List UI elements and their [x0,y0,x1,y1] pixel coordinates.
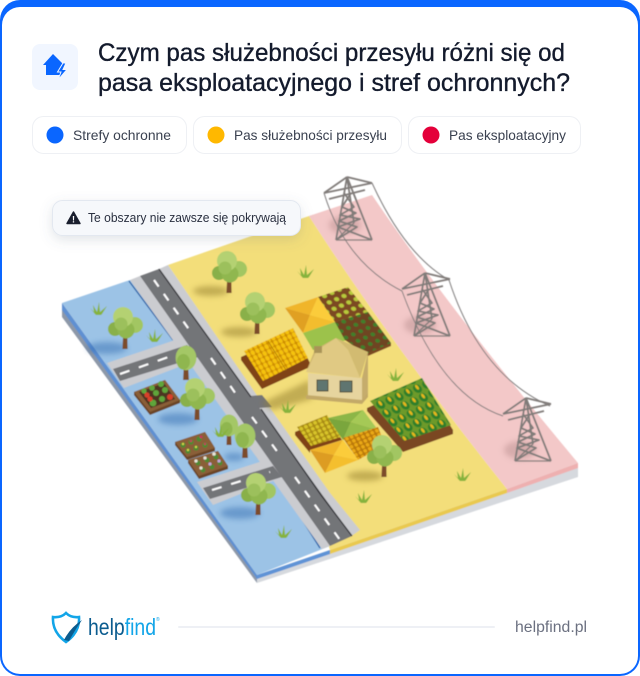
zone: pas eksploatacyjny (pink) [309,195,578,489]
transmission towers [324,177,551,461]
callout [52,200,300,236]
legend: strefy ochronne: Strefy ochronne [73,127,171,143]
trees [108,251,402,515]
icon: house with lightning bolt [32,44,78,90]
field: dark green sprouts [335,312,391,356]
field: small yellow pyramid [310,440,358,473]
slab side faces [62,303,578,583]
field: wheat [241,328,310,389]
legend: strefy ochronne [32,116,186,154]
title: Czym pas służebności przesyłu różni się od [98,39,565,67]
garden bed: vegetables [134,380,180,415]
field: yellow-green sprouts [318,287,368,322]
field: yellow pyramid roof [285,297,335,333]
garden bed: flowers 1 [175,432,215,460]
field: green pyramid [328,410,378,440]
callout: Te obszary nie zawsze się pokrywają [88,211,286,225]
legend: pas eksploatacyjny [408,116,580,154]
legend: pas służebności przesyłu: Pas służebności przesyłu [234,127,387,143]
icon: warning triangle [67,212,80,224]
garden bed: flowers 2 [188,451,228,479]
field: orange crop [343,427,385,460]
zone: strefy ochronne (blue) [62,280,330,575]
footer divider [178,626,495,628]
curb shadow lines [129,281,320,548]
isometric map illustration [62,177,578,583]
title: pasa eksploatacyjnego i stref ochronnych? [98,69,570,97]
title [98,39,570,97]
logo: helpfind: ® [156,616,160,623]
field: green pyramid roof behind house [303,322,347,350]
power line wires [324,183,550,416]
logo: helpfind: helpfind [88,614,156,640]
field: small wheat [295,415,342,453]
legend: pas eksploatacyjny: Pas eksploatacyjny [449,127,566,143]
house [306,338,368,404]
field: corn [367,378,453,452]
tree shadows [87,342,260,519]
legend: pas służebności przesyłu [194,116,402,154]
road network [107,265,360,549]
logo: helpfind [53,613,160,642]
icon: warning triangle: ! [72,214,75,224]
grass tufts [90,265,471,538]
icon: shield [53,613,82,642]
website address: helpfind.pl [515,619,587,636]
zone: pas służebności (yellow) [168,216,507,550]
